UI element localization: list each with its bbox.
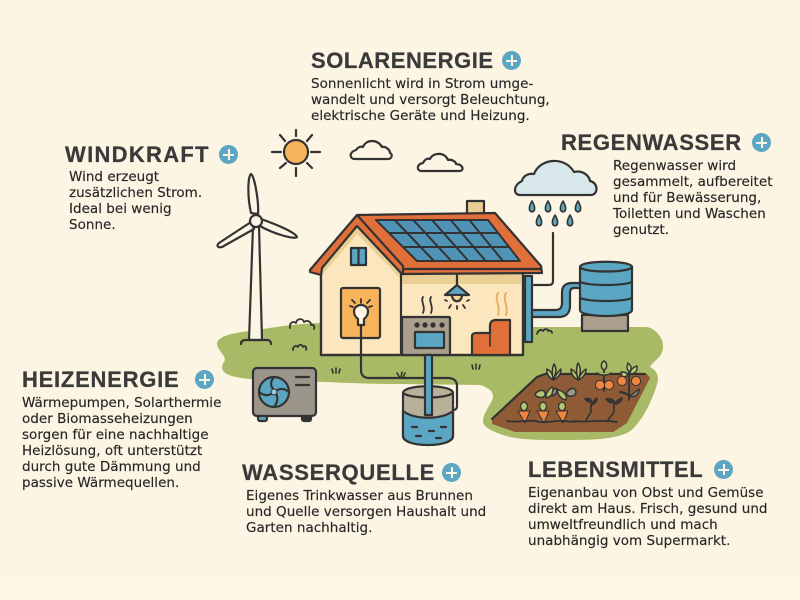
panel: Windkraft	[64, 142, 238, 233]
icon: sun	[272, 130, 320, 176]
panel: Lebensmittel	[528, 457, 768, 549]
cabbage	[535, 387, 576, 400]
heading: Windkraft: WINDKRAFT	[65, 142, 210, 167]
text: Lebensmittel: Eigenanbau von Obst und Gemüse	[528, 485, 764, 501]
chimney	[467, 201, 484, 215]
text: Heizenergie: durch gute Dämmung und	[22, 459, 201, 475]
electric panel	[341, 288, 380, 355]
sprouts	[585, 398, 622, 420]
lettuce	[547, 363, 586, 380]
heading: Heizenergie: HEIZENERGIE	[22, 367, 179, 392]
text: Regenwasser: Regenwasser wird	[613, 158, 736, 174]
text: Lebensmittel	[528, 485, 768, 549]
plus icon	[442, 463, 461, 482]
text: Regenwasser: gesammelt, aufbereitet	[613, 174, 773, 190]
text: Heizenergie	[22, 395, 221, 491]
plus icon	[714, 460, 733, 479]
text: Solarenergie	[311, 76, 550, 124]
heading: Solarenergie: SOLARENERGIE	[311, 48, 494, 73]
heading: Wasserquelle: WASSERQUELLE	[242, 460, 435, 485]
text: Windkraft: zusätzlichen Strom.	[69, 185, 202, 201]
panel: Regenwasser	[561, 130, 773, 238]
walls	[321, 268, 523, 355]
text: Regenwasser: genutzt.	[613, 222, 669, 238]
text: Lebensmittel: direkt am Haus. Frisch, gesund und	[528, 501, 768, 517]
text: Wasserquelle: und Quelle versorgen Haushalt und	[246, 504, 486, 520]
solar panel	[376, 220, 520, 261]
text: Wasserquelle	[246, 488, 486, 536]
lamp	[445, 274, 469, 309]
plus icon	[502, 51, 521, 70]
icon: wind turbine	[218, 174, 297, 344]
tomato plants	[595, 361, 614, 391]
text: Windkraft: Ideal bei wenig	[69, 201, 172, 217]
panel: Solarenergie	[311, 48, 550, 124]
icon: cloud left	[351, 141, 392, 159]
icon: well with water	[361, 355, 457, 445]
text: Wasserquelle: Eigenes Trinkwasser aus Brunnen	[246, 488, 473, 504]
text: Heizenergie: oder Biomasseheizungen	[22, 411, 193, 427]
heading: Regenwasser: REGENWASSER	[561, 130, 742, 155]
text: Lebensmittel: unabhängig vom Supermarkt.	[528, 533, 730, 549]
text: Solarenergie: wandelt und versorgt Beleuchtung,	[311, 92, 550, 108]
text: Regenwasser: und für Bewässerung,	[613, 190, 761, 206]
text: Heizenergie: sorgen für eine nachhaltige	[22, 427, 209, 443]
lawn	[217, 319, 663, 440]
panel: Wasserquelle	[242, 460, 486, 536]
plus icon	[752, 133, 771, 152]
icon: heat pump	[253, 368, 316, 421]
text: Wasserquelle: Garten nachhaltig.	[246, 520, 372, 536]
icon: house	[310, 201, 542, 355]
biomass stove	[472, 320, 510, 355]
text: Heizenergie: passive Wärmequellen.	[22, 475, 179, 491]
text: Solarenergie: elektrische Geräte und Heizung.	[311, 108, 530, 124]
text: Regenwasser: Toiletten und Waschen	[613, 206, 766, 222]
text: Windkraft: Sonne.	[69, 217, 116, 233]
stove heat	[497, 293, 507, 315]
icon: downpipe and water tank	[525, 262, 632, 342]
roof	[310, 213, 542, 275]
icon: cloud right	[418, 154, 463, 171]
plus icon	[195, 370, 214, 389]
text: Regenwasser	[612, 158, 773, 238]
text: Heizenergie: Heizlösung, oft unterstützt	[22, 443, 202, 459]
text: Lebensmittel: umweltfreundlich und mach	[528, 517, 718, 533]
text: Windkraft	[69, 169, 202, 233]
plus icon	[219, 145, 238, 164]
carrots	[518, 402, 568, 423]
heading: Lebensmittel: LEBENSMITTEL	[528, 457, 703, 482]
icon: rain cloud	[515, 161, 596, 285]
stove	[402, 297, 450, 355]
text: Heizenergie: Wärmepumpen, Solarthermie	[22, 395, 221, 411]
panel: Heizenergie	[22, 367, 221, 491]
icon: garden bed	[492, 361, 650, 432]
text: Solarenergie: Sonnenlicht wird in Strom umge-	[311, 76, 533, 92]
window	[351, 248, 366, 265]
text: Windkraft: Wind erzeugt	[69, 169, 159, 185]
